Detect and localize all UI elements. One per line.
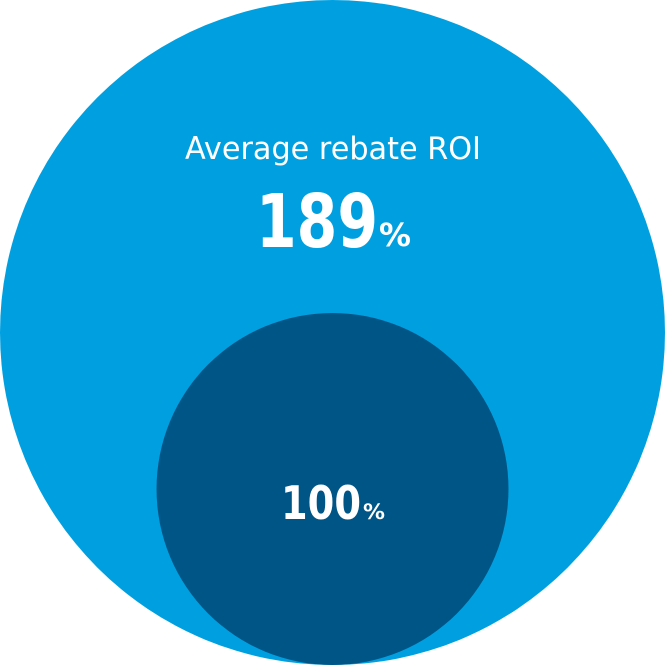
value: 100%: % <box>363 500 385 524</box>
inner circle: baseline <box>156 313 508 665</box>
value: 189%: % <box>379 216 411 254</box>
value: 100%: 100 <box>281 476 361 530</box>
value: 189%: 189 <box>256 179 378 265</box>
heading: Average rebate ROI: Average rebate ROI <box>185 131 481 167</box>
